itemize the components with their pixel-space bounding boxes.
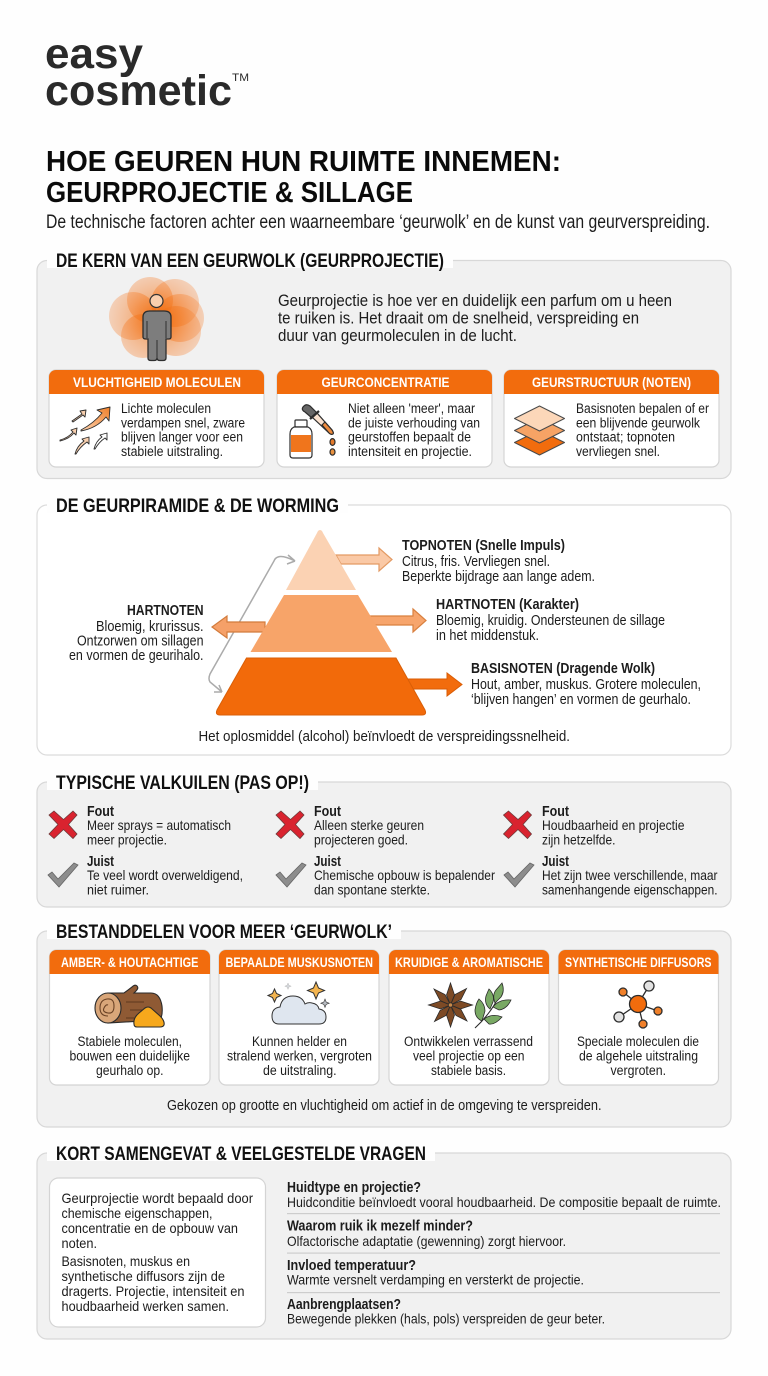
logo: [45, 30, 249, 115]
text block: topnoten: Beperkte bijdrage aan lange adem.: [402, 569, 595, 585]
title: [46, 146, 561, 209]
card: geurstructuur: [504, 370, 719, 467]
column: valkuil 1: niet ruimer.: [87, 882, 149, 898]
card: samenvatting: concentratie en de opbouw van: [62, 1220, 238, 1236]
card: muskusnoten: [219, 950, 379, 1085]
card: samenvatting: dragerts. Projectie, intensiteit en: [62, 1283, 244, 1299]
text block: hartnoten karakter: [436, 597, 665, 644]
caption: gekozen op grootte: Gekozen op grootte en vluchtigheid om actief in de omgeving te verspreiden.: [167, 1097, 602, 1114]
logo: easy: [45, 30, 143, 78]
card: samenvatting: Geurprojectie wordt bepaald door: [62, 1190, 253, 1206]
heading: de kern: DE KERN VAN EEN GEURWOLK (GEURPROJECTIE): [56, 250, 444, 272]
card: vluchtigheid moleculen: stabiele uitstraling.: [121, 444, 223, 459]
faq: huidtype: Huidconditie beïnvloedt vooral houdbaarheid. De compositie bepaalt de ruimte.: [287, 1194, 721, 1210]
faq: waarom ruik ik mezelf minder: Olfactorische adaptatie (gewenning) zorgt hiervoor.: [287, 1233, 566, 1249]
card: geurstructuur: Basisnoten bepalen of er: [576, 401, 709, 416]
icon: red cross: [49, 811, 77, 838]
card: geurstructuur: ontstaat; topnoten: [576, 430, 675, 445]
faq: waarom ruik ik mezelf minder: Waarom ruik ik mezelf minder?: [287, 1218, 473, 1234]
heading: typische valkuilen: TYPISCHE VALKUILEN (PAS OP!): [56, 772, 309, 794]
text block: topnoten: Citrus, fris. Vervliegen snel.: [402, 554, 550, 570]
title: HOE GEUREN HUN RUIMTE INNEMEN:: [46, 146, 561, 178]
panel: bestanddelen: [37, 921, 731, 1127]
icon: stacked note layers: [514, 406, 564, 455]
arrow: heart notes left: [212, 616, 265, 638]
icon: molecule: [614, 981, 662, 1028]
card: synthetische diffusors: SYNTHETISCHE DIFFUSORS: [565, 955, 712, 970]
text block: hartnoten links: HARTNOTEN: [127, 603, 204, 619]
icon: person with scent halo: [109, 277, 204, 360]
text block: hartnoten links: en vormen de geurihalo.: [69, 648, 204, 664]
heading: bestanddelen: BESTANDDELEN VOOR MEER ‘GEURWOLK’: [56, 921, 392, 943]
panel: typische valkuilen: [37, 772, 731, 907]
heading: kort samengevat: KORT SAMENGEVAT & VEELGESTELDE VRAGEN: [56, 1143, 426, 1165]
panel: de kern van een geurwolk: [37, 250, 731, 478]
card: kruidig en aromatisch: KRUIDIGE & AROMATISCHE: [395, 955, 543, 970]
column: valkuil 3: samenhangende eigenschappen.: [542, 882, 718, 898]
card: muskusnoten: de uitstraling.: [263, 1063, 336, 1078]
card: samenvatting: synthetische diffusors zijn de: [62, 1268, 225, 1284]
card: samenvatting: noten.: [62, 1235, 97, 1251]
card: samenvatting: houdbaarheid werken samen.: [62, 1298, 229, 1314]
card: muskusnoten: stralend werken, vergroten: [227, 1048, 372, 1064]
faq: aanbrengplaatsen: Aanbrengplaatsen?: [287, 1297, 401, 1313]
column: valkuil 2: Juist: [314, 854, 341, 870]
card: geurconcentratie: de juiste verhouding van: [348, 415, 480, 430]
faq: huidtype: [287, 1180, 721, 1210]
icon: grey check: [48, 863, 78, 887]
icon: rising molecule arrows: [60, 407, 110, 454]
text block: hartnoten karakter: HARTNOTEN (Karakter): [436, 597, 579, 613]
card: geurconcentratie: intensiteit en projectie.: [348, 444, 472, 459]
column: valkuil 2: projecteren goed.: [314, 832, 408, 848]
arrow: top notes: [336, 548, 392, 571]
logo: TM: [232, 72, 249, 84]
icon: cloud with sparkles: [268, 982, 329, 1024]
panel: de geurpiramide: [37, 495, 731, 755]
card: muskusnoten: BEPAALDE MUSKUSNOTEN: [226, 955, 373, 970]
column: valkuil 1: Meer sprays = automatisch: [87, 817, 231, 833]
chart: fragrance pyramid: [216, 530, 426, 715]
card: geurconcentratie: geurstoffen bepaalt de: [348, 430, 471, 445]
card: synthetische diffusors: [558, 950, 718, 1085]
icon: star anise and leaves: [428, 983, 511, 1028]
icon: red cross: [276, 811, 304, 838]
faq: aanbrengplaatsen: [287, 1297, 605, 1326]
card: amber en hout: Stabiele moleculen,: [78, 1034, 182, 1049]
icon: bottle and dropper: [290, 405, 335, 458]
card: samenvatting: chemische eigenschappen,: [62, 1205, 212, 1221]
column: valkuil 2: Chemische opbouw is bepalender: [314, 867, 495, 883]
caption: oplosmiddel: Het oplosmiddel (alcohol) beïnvloedt de verspreidingssnelheid.: [198, 728, 570, 745]
card: kruidig en aromatisch: Ontwikkelen verrassend: [404, 1034, 533, 1049]
arrow: base notes: [404, 673, 462, 696]
card: amber en hout: AMBER- & HOUTACHTIGE: [61, 955, 198, 970]
column: valkuil 3: Juist: [542, 854, 569, 870]
column: valkuil 1: meer projectie.: [87, 832, 167, 848]
column: valkuil 2: Alleen sterke geuren: [314, 817, 424, 833]
card: vluchtigheid moleculen: [49, 370, 264, 467]
card: kruidig en aromatisch: stabiele basis.: [431, 1063, 506, 1078]
card: geurconcentratie: Niet alleen 'meer', maar: [348, 401, 475, 416]
column: valkuil 1: Fout: [87, 804, 114, 820]
card: vluchtigheid moleculen: blijven langer voor een: [121, 430, 243, 445]
column: valkuil 3: zijn hetzelfde.: [542, 832, 616, 848]
text block: hartnoten links: Ontzorwen om sillagen: [77, 634, 204, 650]
card: kruidig en aromatisch: veel projectie op een: [413, 1048, 524, 1064]
text block: topnoten: TOPNOTEN (Snelle Impuls): [402, 538, 565, 554]
text block: definition: te ruiken is. Het draait om de snelheid, verspreiding en: [278, 310, 639, 328]
card: geurstructuur: een blijvende geurwolk: [576, 415, 700, 430]
column: valkuil 1: Juist: [87, 854, 114, 870]
column: valkuil 2: [276, 804, 495, 898]
text block: definition: [278, 292, 672, 345]
icon: grey check: [504, 863, 534, 887]
card: samenvatting: Basisnoten, muskus en: [62, 1253, 190, 1269]
card: muskusnoten: Kunnen helder en: [252, 1034, 347, 1049]
faq: waarom ruik ik mezelf minder: [287, 1218, 566, 1249]
text block: topnoten: [402, 538, 595, 585]
text block: definition: Geurprojectie is hoe ver en duidelijk een parfum om u heen: [278, 292, 672, 310]
faq: invloed temperatuur: Invloed temperatuur?: [287, 1258, 416, 1274]
text block: basisnoten: BASISNOTEN (Dragende Wolk): [471, 661, 655, 677]
card: synthetische diffusors: de algehele uitstraling: [579, 1048, 698, 1064]
icon: grey check: [276, 863, 306, 887]
card: geurstructuur: vervliegen snel.: [576, 444, 660, 459]
card: geurconcentratie: GEURCONCENTRATIE: [322, 375, 450, 390]
card: amber en hout: geurhalo op.: [96, 1063, 164, 1078]
icon: log with amber: [95, 985, 164, 1027]
card: samenvatting: [50, 1178, 266, 1327]
card: amber en hout: bouwen een duidelijke: [70, 1048, 190, 1064]
column: valkuil 2: Fout: [314, 804, 341, 820]
text block: basisnoten: [471, 661, 701, 708]
logo: cosmetic: [45, 67, 232, 115]
column: valkuil 3: [504, 804, 718, 898]
text block: hartnoten links: Bloemig, krurissus.: [96, 619, 204, 635]
panel: samenvatting en vragen: [37, 1143, 731, 1339]
card: synthetische diffusors: Speciale moleculen die: [577, 1034, 699, 1049]
text block: hartnoten karakter: in het middenstuk.: [436, 628, 539, 644]
column: valkuil 3: Fout: [542, 804, 569, 820]
column: valkuil 1: Te veel wordt overweldigend,: [87, 867, 243, 883]
column: valkuil 3: Houdbaarheid en projectie: [542, 817, 685, 833]
heading: de geurpiramide: DE GEURPIRAMIDE & DE WORMING: [56, 495, 339, 517]
card: amber en hout: [50, 950, 210, 1085]
column: valkuil 1: [48, 804, 243, 898]
card: geurstructuur: GEURSTRUCTUUR (NOTEN): [532, 375, 691, 390]
card: vluchtigheid moleculen: verdampen snel, zware: [121, 415, 245, 430]
text block: basisnoten: ‘blijven hangen’ en vormen de geurhalo.: [471, 692, 691, 708]
faq: huidtype: Huidtype en projectie?: [287, 1180, 421, 1196]
faq: invloed temperatuur: [287, 1258, 584, 1288]
arrow: heart notes right: [368, 609, 426, 632]
text block: definition: duur van geurmoleculen in de lucht.: [278, 327, 517, 345]
card: kruidig en aromatisch: [389, 950, 549, 1085]
text block: hartnoten links: [69, 603, 204, 664]
faq: aanbrengplaatsen: Bewegende plekken (hals, pols) verspreiden de geur beter.: [287, 1310, 605, 1326]
text block: hartnoten karakter: Bloemig, kruidig. Ondersteunen de sillage: [436, 613, 665, 629]
column: valkuil 3: Het zijn twee verschillende, maar: [542, 867, 718, 883]
icon: red cross: [504, 811, 532, 838]
card: vluchtigheid moleculen: VLUCHTIGHEID MOLECULEN: [73, 375, 241, 390]
text block: basisnoten: Hout, amber, muskus. Grotere moleculen,: [471, 677, 701, 693]
card: vluchtigheid moleculen: Lichte moleculen: [121, 401, 211, 416]
title: GEURPROJECTIE & SILLAGE: [46, 177, 413, 209]
column: valkuil 2: dan spontane sterkte.: [314, 882, 430, 898]
card: synthetische diffusors: vergroten.: [610, 1063, 666, 1078]
arrow: circulation loop: [209, 555, 295, 692]
card: geurconcentratie: [277, 370, 492, 467]
faq: invloed temperatuur: Warmte versnelt verdamping en versterkt de projectie.: [287, 1272, 584, 1288]
